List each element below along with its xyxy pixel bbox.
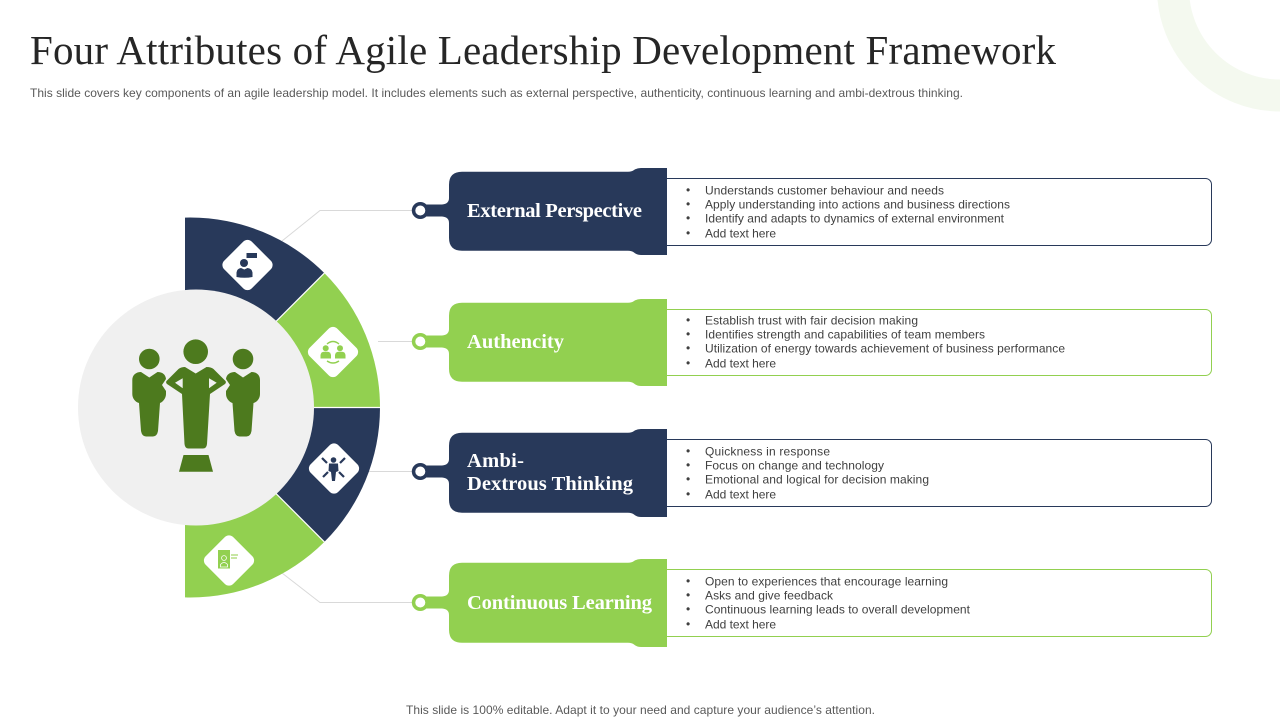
bullet list: Continuous learning leads to overall development (705, 602, 971, 616)
card outline (640, 440, 1212, 506)
bullet list: Add text here (705, 618, 776, 632)
footer note: This slide is 100% editable. Adapt it to your need and capture your audience’s attention. (406, 703, 875, 717)
bullet list: • (686, 458, 690, 472)
tab (425, 168, 667, 255)
bullet list: • (686, 588, 690, 602)
icon: team of three leaders on a podium (132, 339, 260, 472)
heading line two: Dextrous Thinking (467, 473, 634, 495)
bullet list: Open to experiences that encourage learning (705, 574, 948, 588)
heading: External Perspective (467, 200, 642, 222)
bullet list: • (686, 487, 690, 501)
segment separators (190, 273, 381, 542)
bullet list: • (686, 313, 690, 327)
heading: Continuous Learning (467, 592, 653, 614)
bullet list: Apply understanding into actions and business directions (705, 198, 1010, 212)
bullet list: • (686, 327, 690, 341)
bullet list: • (686, 197, 690, 211)
semicircular segmented ring (185, 217, 380, 597)
bullet list: Asks and give feedback (705, 588, 834, 602)
title: Four Attributes of Agile Leadership Development Framework (30, 27, 1056, 73)
panel: authenticity (414, 299, 1212, 386)
icon: person with converging arrows (306, 441, 362, 496)
bullet list: Add text here (705, 488, 776, 502)
bullet list (686, 574, 971, 632)
ring (414, 465, 427, 478)
diamond (305, 324, 361, 380)
card outline (640, 310, 1212, 376)
bullet list: Focus on change and technology (705, 458, 884, 472)
bullet list: • (686, 574, 690, 588)
bullet list: Add text here (705, 356, 776, 370)
ring (414, 335, 427, 348)
panel: continuous learning (414, 559, 1212, 647)
ring (414, 596, 427, 609)
ring (414, 204, 427, 217)
connector lines (282, 210, 413, 602)
tab (425, 299, 667, 386)
segment: authenticity (190, 273, 380, 408)
bullet list (686, 444, 929, 502)
subtitle: This slide covers key components of an agile leadership model. It includes elements such as external perspective, authenticity, continuous learning and ambi-dextrous thinking. (30, 86, 963, 100)
card outline (640, 570, 1212, 636)
bullet list: Establish trust with fair decision making (705, 314, 918, 328)
right person (226, 349, 260, 436)
bullet list: • (686, 617, 690, 631)
bullet list: Quickness in response (705, 444, 830, 458)
bullet list: Utilization of energy towards achievement of business performance (705, 342, 1065, 356)
centre grey circle (78, 290, 314, 526)
bullet list (686, 313, 1065, 370)
bullet list: Understands customer behaviour and needs (705, 184, 944, 198)
bullet list: Emotional and logical for decision making (705, 472, 929, 486)
tab (425, 429, 667, 517)
diamond (220, 237, 275, 293)
tab (425, 559, 667, 647)
bullet list: • (686, 472, 690, 486)
icon: person with flag (220, 237, 275, 293)
bullet list (686, 183, 1010, 240)
bullet list: Add text here (705, 226, 776, 240)
segment: external perspective (185, 217, 324, 408)
segment: continuous learning (185, 408, 324, 598)
bullet list: • (686, 444, 690, 458)
heading: Authencity (467, 331, 565, 353)
panel: external perspective (414, 168, 1212, 255)
bullet list: • (686, 341, 690, 355)
decorative ring, top right (1173, 0, 1280, 96)
heading: Ambi- (467, 450, 524, 472)
bullet list: • (686, 226, 690, 240)
card outline (640, 178, 1212, 246)
segment: ambi-dextrous thinking (190, 408, 380, 542)
icon: person on screen with speaker (201, 533, 257, 588)
panel: ambi-dextrous thinking (414, 429, 1212, 517)
bullet list: • (686, 211, 690, 225)
diamond (306, 441, 362, 496)
bullet list: • (686, 602, 690, 616)
bullet list: • (686, 356, 690, 370)
centre person (166, 339, 226, 448)
left person (132, 349, 166, 436)
diamond (201, 533, 257, 588)
bullet list: • (686, 183, 690, 197)
bullet list: Identifies strength and capabilities of team members (705, 328, 985, 342)
icon: people exchanging (305, 324, 361, 380)
bullet list: Identify and adapts to dynamics of external environment (705, 212, 1005, 226)
podium (179, 455, 213, 472)
